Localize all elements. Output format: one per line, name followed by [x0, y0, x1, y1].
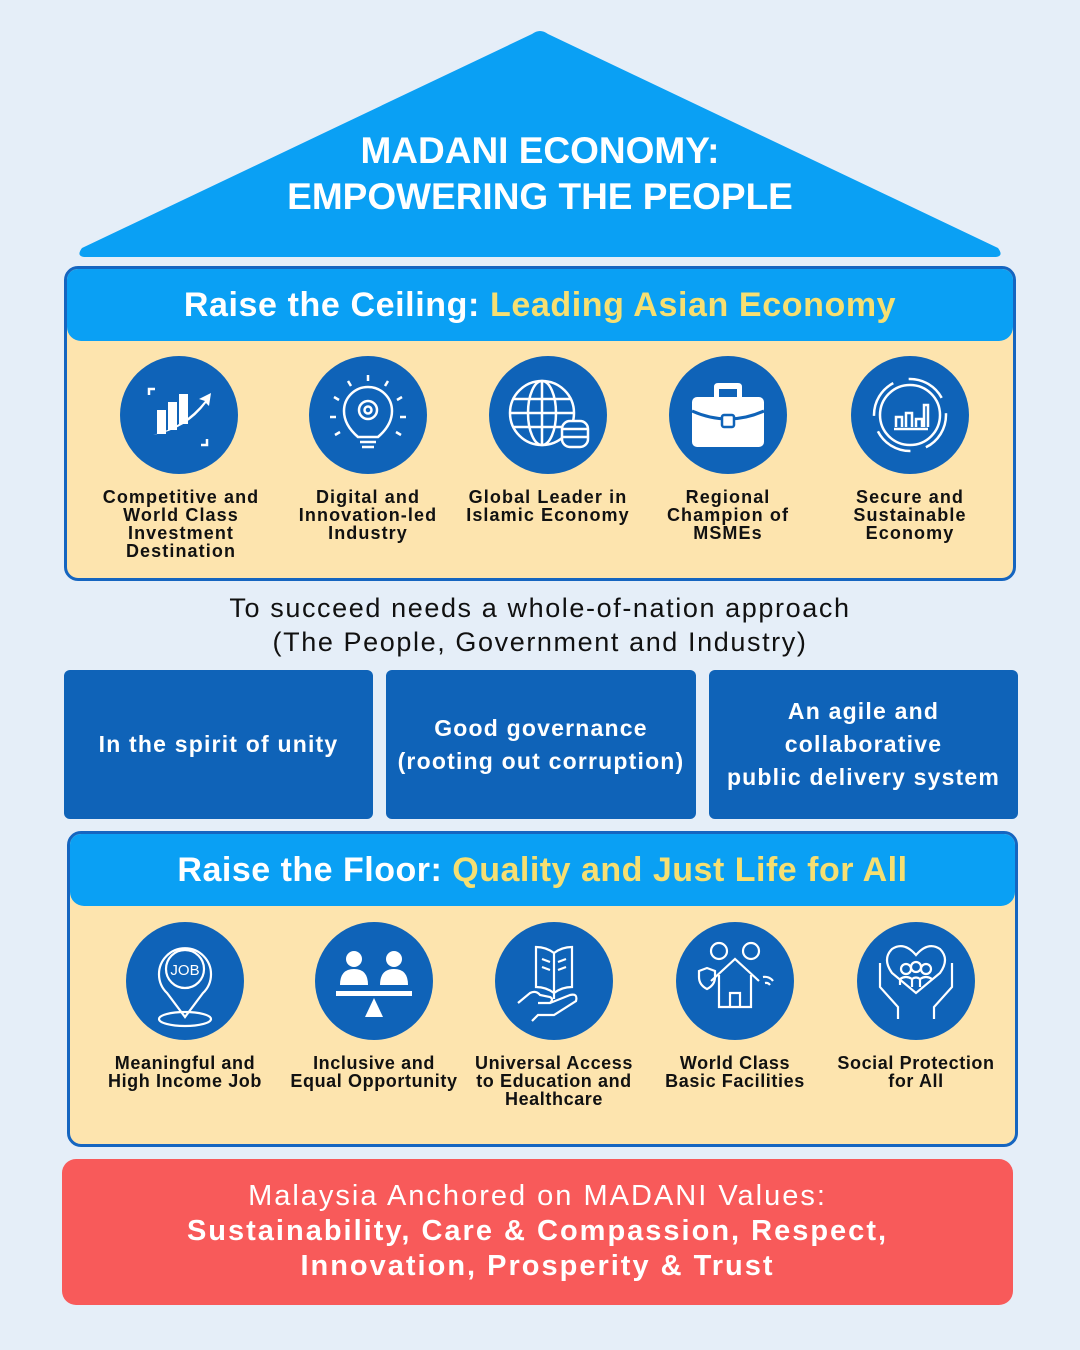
icon: job pin — [126, 922, 244, 1040]
heading: floor: Raise the Floor: Quality and Just Life for All — [177, 851, 908, 889]
label: job — [108, 1053, 262, 1091]
label: MSMEs: Regional — [686, 487, 770, 507]
label: facilities — [665, 1053, 805, 1091]
label: digital: Digital and — [316, 487, 420, 507]
label: investment: Destination — [126, 541, 236, 561]
label: islamic economy: Global Leader in — [469, 487, 627, 507]
label: equal: Equal Opportunity — [290, 1071, 458, 1091]
label: investment: Investment — [128, 523, 234, 543]
label: social — [837, 1053, 995, 1091]
label: education: Healthcare — [505, 1089, 603, 1109]
whole-of-nation text: (The People, Government and Industry) — [273, 627, 807, 657]
label: islamic economy: Islamic Economy — [466, 505, 630, 525]
values text: Malaysia Anchored on MADANI Values: — [248, 1180, 827, 1212]
icon: equal opportunity — [315, 922, 433, 1040]
heading: ceiling: Raise the Ceiling: Leading Asian Economy — [184, 286, 896, 324]
icon: briefcase — [669, 356, 787, 474]
label: digital: Industry — [328, 523, 408, 543]
title: MADANI ECONOMY: — [360, 130, 720, 171]
label: equal — [290, 1053, 458, 1091]
label: social: for All — [888, 1071, 944, 1091]
values text: Innovation, Prosperity & Trust — [300, 1250, 775, 1282]
box: delivery: public delivery system — [727, 764, 1000, 790]
label: islamic economy — [466, 487, 630, 525]
label: education: to Education and — [476, 1071, 632, 1091]
icon: growth chart — [120, 356, 238, 474]
label: education — [475, 1053, 633, 1109]
icon: globe coins — [489, 356, 607, 474]
title — [287, 130, 793, 217]
icon: sustainable cycle — [851, 356, 969, 474]
icon: job pin: JOB — [170, 962, 200, 979]
box: delivery: collaborative — [785, 731, 942, 757]
label: MSMEs: MSMEs — [693, 523, 763, 543]
heading: ceiling — [67, 269, 1013, 341]
icon: book hand — [495, 922, 613, 1040]
panel: raise the ceiling — [64, 266, 1016, 581]
roof — [79, 31, 1001, 257]
title: EMPOWERING THE PEOPLE — [287, 176, 793, 217]
whole-of-nation text — [229, 593, 851, 657]
label: MSMEs — [667, 487, 789, 543]
box: governance — [386, 670, 696, 819]
icon: lightbulb gear — [309, 356, 427, 474]
label: facilities: World Class — [680, 1053, 790, 1073]
box: unity: In the spirit of unity — [99, 731, 338, 757]
label: digital — [299, 487, 437, 543]
box: delivery — [709, 670, 1018, 819]
label: investment: World Class — [123, 505, 239, 525]
label: education: Universal Access — [475, 1053, 633, 1073]
label: sustainable — [853, 487, 967, 543]
box: governance: Good governance — [434, 714, 648, 740]
label: sustainable: Economy — [866, 523, 954, 543]
label: facilities: Basic Facilities — [665, 1071, 805, 1091]
label: job: High Income Job — [108, 1071, 262, 1091]
values text — [187, 1180, 888, 1282]
label: equal: Inclusive and — [313, 1053, 435, 1073]
label: MSMEs: Champion of — [667, 505, 789, 525]
panel: raise the floor — [67, 831, 1018, 1147]
whole-of-nation text: To succeed needs a whole-of-nation approach — [229, 593, 851, 623]
label: job: Meaningful and — [115, 1053, 255, 1073]
values text: Sustainability, Care & Compassion, Respect, — [187, 1215, 888, 1247]
label: sustainable: Sustainable — [853, 505, 967, 525]
label: social: Social Protection — [837, 1053, 995, 1073]
box: unity — [64, 670, 373, 819]
label: investment — [103, 487, 259, 561]
box: governance: (rooting out corruption) — [398, 748, 684, 774]
icon: house facilities — [676, 922, 794, 1040]
box: delivery: An agile and — [788, 698, 939, 724]
panel: madani values — [62, 1159, 1013, 1305]
label: sustainable: Secure and — [856, 487, 964, 507]
label: investment: Competitive and — [103, 487, 259, 507]
icon: social protection — [857, 922, 975, 1040]
label: digital: Innovation-led — [299, 505, 437, 525]
heading: floor — [70, 834, 1015, 906]
